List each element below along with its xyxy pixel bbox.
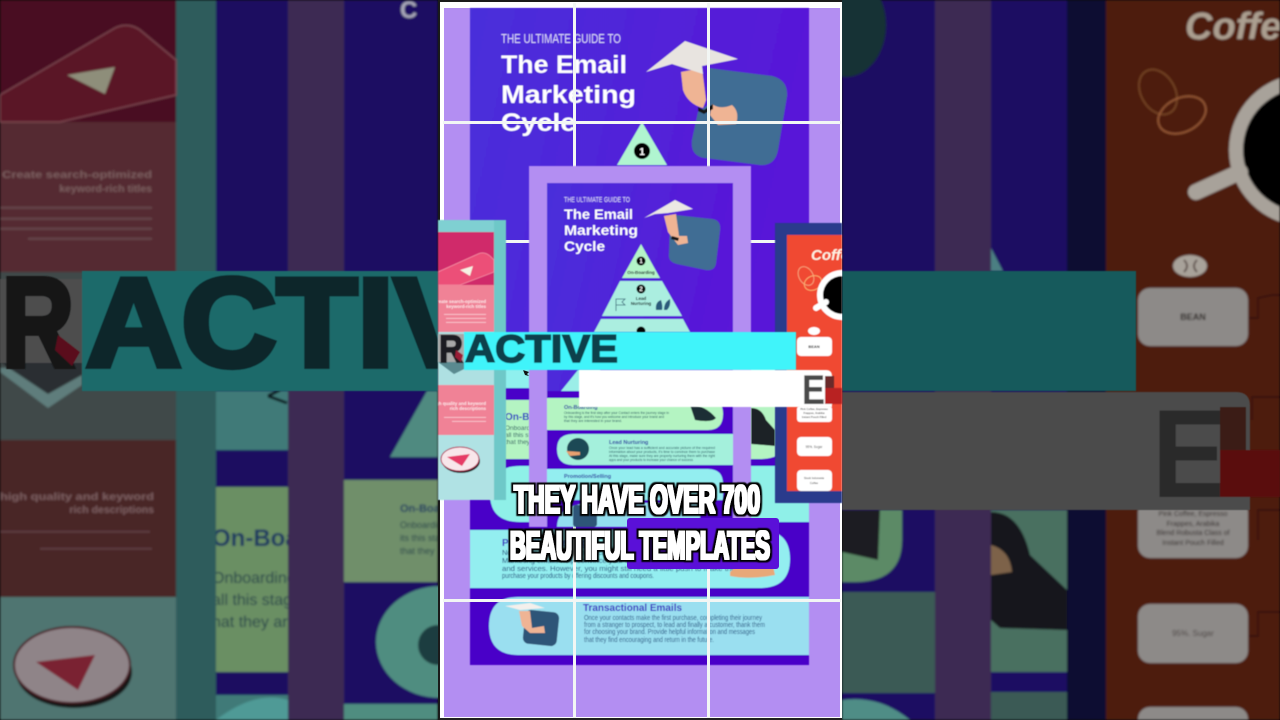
right background banner and grey band with EL letters bbox=[842, 271, 1280, 524]
animated word: ACTIVE on cyan strip bbox=[438, 328, 796, 374]
heading: the email marketing cycle bbox=[501, 32, 636, 137]
pyramid badge 1 bbox=[634, 143, 650, 159]
animated word: EL on white strip bbox=[579, 366, 842, 413]
inner pyramid tier 3 bbox=[594, 319, 690, 336]
pyramid top tier bbox=[617, 122, 667, 165]
inner pyramid tier 1: On-Boarding bbox=[627, 270, 655, 275]
inner pyramid bottom tier bbox=[561, 370, 600, 391]
inner row: promotion: Promotion/Selling bbox=[564, 474, 611, 480]
left background banner with text ACTIV: ACTIVE bbox=[86, 252, 570, 393]
left blurred background panel: Create search-optimized bbox=[2, 169, 152, 181]
inner title: The Email bbox=[564, 206, 633, 222]
left blurred background panel: Onboarding bbox=[212, 570, 296, 587]
left template card: high quality and keyword bbox=[432, 401, 486, 406]
inner icon: blue square bbox=[669, 215, 720, 270]
inner pyramid tier 2 bbox=[602, 281, 682, 316]
left blurred background panel: Onboarding bbox=[400, 520, 447, 530]
left blurred background panel: high quality and keyword bbox=[0, 491, 154, 503]
inner row: promotion bbox=[547, 469, 723, 527]
inner row: on-boarding: On-Boarding bbox=[564, 405, 598, 411]
transactional emails text: Transactional Emails bbox=[583, 603, 682, 614]
animated word: EL on white strip: E bbox=[802, 366, 825, 413]
right blurred background panel: Frappes, Arabika bbox=[1167, 521, 1220, 528]
right template card: Stock Indonesia bbox=[804, 476, 824, 480]
heading: the email marketing cycle: The Email bbox=[501, 51, 627, 79]
inner title: THE ULTIMATE GUIDE TO bbox=[564, 197, 630, 204]
icon: wrist strap bbox=[698, 104, 713, 114]
inner icon: paper plane bbox=[644, 200, 693, 218]
inner pyramid tier 2: 2 bbox=[639, 287, 643, 293]
inner pyramid tier 1 bbox=[622, 244, 660, 278]
right blurred background panel: BEAN bbox=[1180, 312, 1206, 322]
left template card: keyword-rich titles bbox=[446, 304, 486, 309]
caption: they have over 700 beautiful templates: THEY HAVE OVER 700 bbox=[514, 478, 760, 522]
caption: they have over 700 beautiful templates: BEAUTIFUL TEMPLATES bbox=[510, 524, 770, 568]
inner pyramid tier 2: Nurturing bbox=[631, 301, 651, 306]
inner pyramid tier 2: Lead bbox=[636, 296, 646, 301]
animated word: ACTIVE on cyan strip: ACTIVE bbox=[465, 328, 618, 371]
inner icon: wrist strap bbox=[671, 236, 679, 241]
right blurred background panel: Pink Coffee, Espresso bbox=[1158, 511, 1228, 518]
right background banner and grey band with EL letters: E bbox=[1152, 385, 1227, 524]
large poster on-boarding text fragment bbox=[506, 412, 530, 446]
left blurred background panel: rich descriptions bbox=[69, 504, 154, 516]
inner row: on-boarding: that they are interested in your brand. bbox=[564, 419, 622, 423]
right template card: Coffee bbox=[811, 247, 857, 264]
transactional emails text: Once your contacts make the first purchase, completing their journey bbox=[584, 615, 762, 622]
large poster pyramid bottom tier bbox=[480, 335, 805, 388]
large poster on-boarding text fragment: On-Boarding bbox=[505, 412, 566, 423]
pyramid badge 1: 1 bbox=[639, 147, 645, 158]
left blurred background panel: On-Boarding bbox=[212, 525, 359, 552]
promotion text bbox=[502, 538, 742, 580]
left blurred background panel bbox=[0, 0, 438, 720]
large poster on-boarding text fragment: that they bbox=[505, 439, 531, 446]
left blurred background panel: all this stage bbox=[212, 592, 301, 609]
promotion text: and services. However, you might still need a little push to make them bbox=[502, 564, 742, 573]
icon: paper plane bbox=[646, 41, 738, 74]
inner title: Cycle bbox=[564, 238, 605, 254]
transactional emails text bbox=[583, 603, 765, 644]
icon: small black arrow bbox=[523, 370, 529, 376]
central video frame bbox=[438, 0, 842, 720]
icon: small square with hand bbox=[505, 603, 560, 647]
large poster row: transactional emails bbox=[489, 597, 809, 655]
right template card: Pink Coffee, Espresso bbox=[800, 407, 828, 411]
left blurred background panel: On-Boarding bbox=[400, 503, 467, 515]
inner title bbox=[564, 197, 638, 254]
left template card: rich descriptions bbox=[450, 406, 486, 411]
left blurred background panel: that they bbox=[400, 546, 435, 556]
transactional emails text: from a stranger to prospect, to lead and finally a customer, thank them bbox=[584, 622, 765, 629]
left blurred background panel: keyword-rich titles bbox=[59, 183, 152, 195]
inner row: lead nurturing: information about your products, it's time to convince them to purchase bbox=[609, 450, 715, 454]
right blurred background panel: 95%. Sugar bbox=[1172, 629, 1214, 638]
large poster on-boarding text fragment: all this stage bbox=[505, 432, 542, 439]
photo grid lines bbox=[443, 3, 841, 718]
inner row: lead nurturing: Lead Nurturing bbox=[609, 440, 648, 446]
large poster person on-boarding bbox=[751, 408, 775, 446]
large poster row: promotion bbox=[470, 530, 790, 588]
right blurred background panel bbox=[806, 0, 1280, 720]
large poster row: on-boarding bbox=[470, 400, 790, 459]
right template card: Coffee bbox=[810, 481, 819, 485]
right blurred background panel: Instant Pouch Filled bbox=[1162, 540, 1224, 547]
transactional emails text: that they find encouraging and return in the future. bbox=[584, 637, 714, 644]
inner row: on-boarding: Onboarding is the first step after your Contact enters the journey stage in bbox=[564, 411, 669, 415]
right blurred background panel: Blend Robusta Class of bbox=[1156, 530, 1230, 537]
caption: they have over 700 beautiful templates bbox=[510, 478, 770, 568]
right template card: 95%. Sugar bbox=[806, 445, 823, 449]
icon: tilted blue square bbox=[692, 68, 787, 165]
transactional emails text: for choosing your brand. Provide helpful information and messages bbox=[584, 629, 755, 636]
heading: the email marketing cycle: THE ULTIMATE GUIDE TO bbox=[501, 32, 621, 46]
inner row: lead nurturing: Once your lead has a sufficient and accurate picture of the required bbox=[609, 446, 715, 450]
large poster on-boarding text fragment: Onboarding bbox=[505, 425, 539, 432]
right template card: Instant Pouch Filled bbox=[802, 415, 827, 419]
heading: the email marketing cycle: Cycle bbox=[501, 109, 576, 137]
inner title: Marketing bbox=[564, 222, 638, 238]
inner pyramid tier 1: 1 bbox=[639, 259, 643, 265]
left blurred background panel: its this stage bbox=[400, 533, 450, 543]
inner row: lead nurturing: At this stage, make sure they are properly nurturing them with the right bbox=[609, 454, 715, 458]
inner row: on-boarding bbox=[547, 398, 723, 430]
promotion text: Nowadays, people are more careful about what they spend on. bbox=[502, 548, 710, 557]
promotion text: Promotion/Selling bbox=[502, 538, 588, 549]
left background banner with text ACTIV: R bbox=[2, 252, 74, 393]
large poster row: lead nurturing bbox=[490, 466, 809, 522]
promotion text: purchase your products by offering discounts and coupons. bbox=[502, 571, 654, 580]
animated word: ACTIVE on cyan strip: R bbox=[439, 328, 463, 371]
left template card: Create search-optimized bbox=[434, 299, 486, 304]
right template card: BEAN bbox=[808, 344, 820, 349]
inner row: lead nurturing bbox=[557, 434, 733, 465]
inner icon: hand bbox=[664, 214, 688, 245]
right template card bbox=[774, 222, 843, 504]
inner poster frame bbox=[529, 166, 751, 527]
large poster bbox=[470, 8, 809, 665]
inner row: lead nurturing: apps and your products to increase your chance of success bbox=[609, 458, 693, 462]
icon: hand bbox=[681, 68, 737, 125]
promotion text: Marketing emails help convince your audience to buy products bbox=[502, 556, 709, 565]
left template card bbox=[432, 220, 506, 500]
heading: the email marketing cycle: Marketing bbox=[501, 81, 636, 109]
person at promotion row bbox=[730, 552, 775, 578]
left blurred background panel: hat they are bbox=[212, 614, 297, 631]
inner row: on-boarding: by this stage, and it's how you welcome and introduce your brand and bbox=[564, 415, 664, 419]
left background banner with text ACTIV bbox=[0, 270, 438, 392]
caption highlight box bbox=[627, 518, 779, 569]
right template card: Frappes, Arabika bbox=[803, 411, 825, 415]
